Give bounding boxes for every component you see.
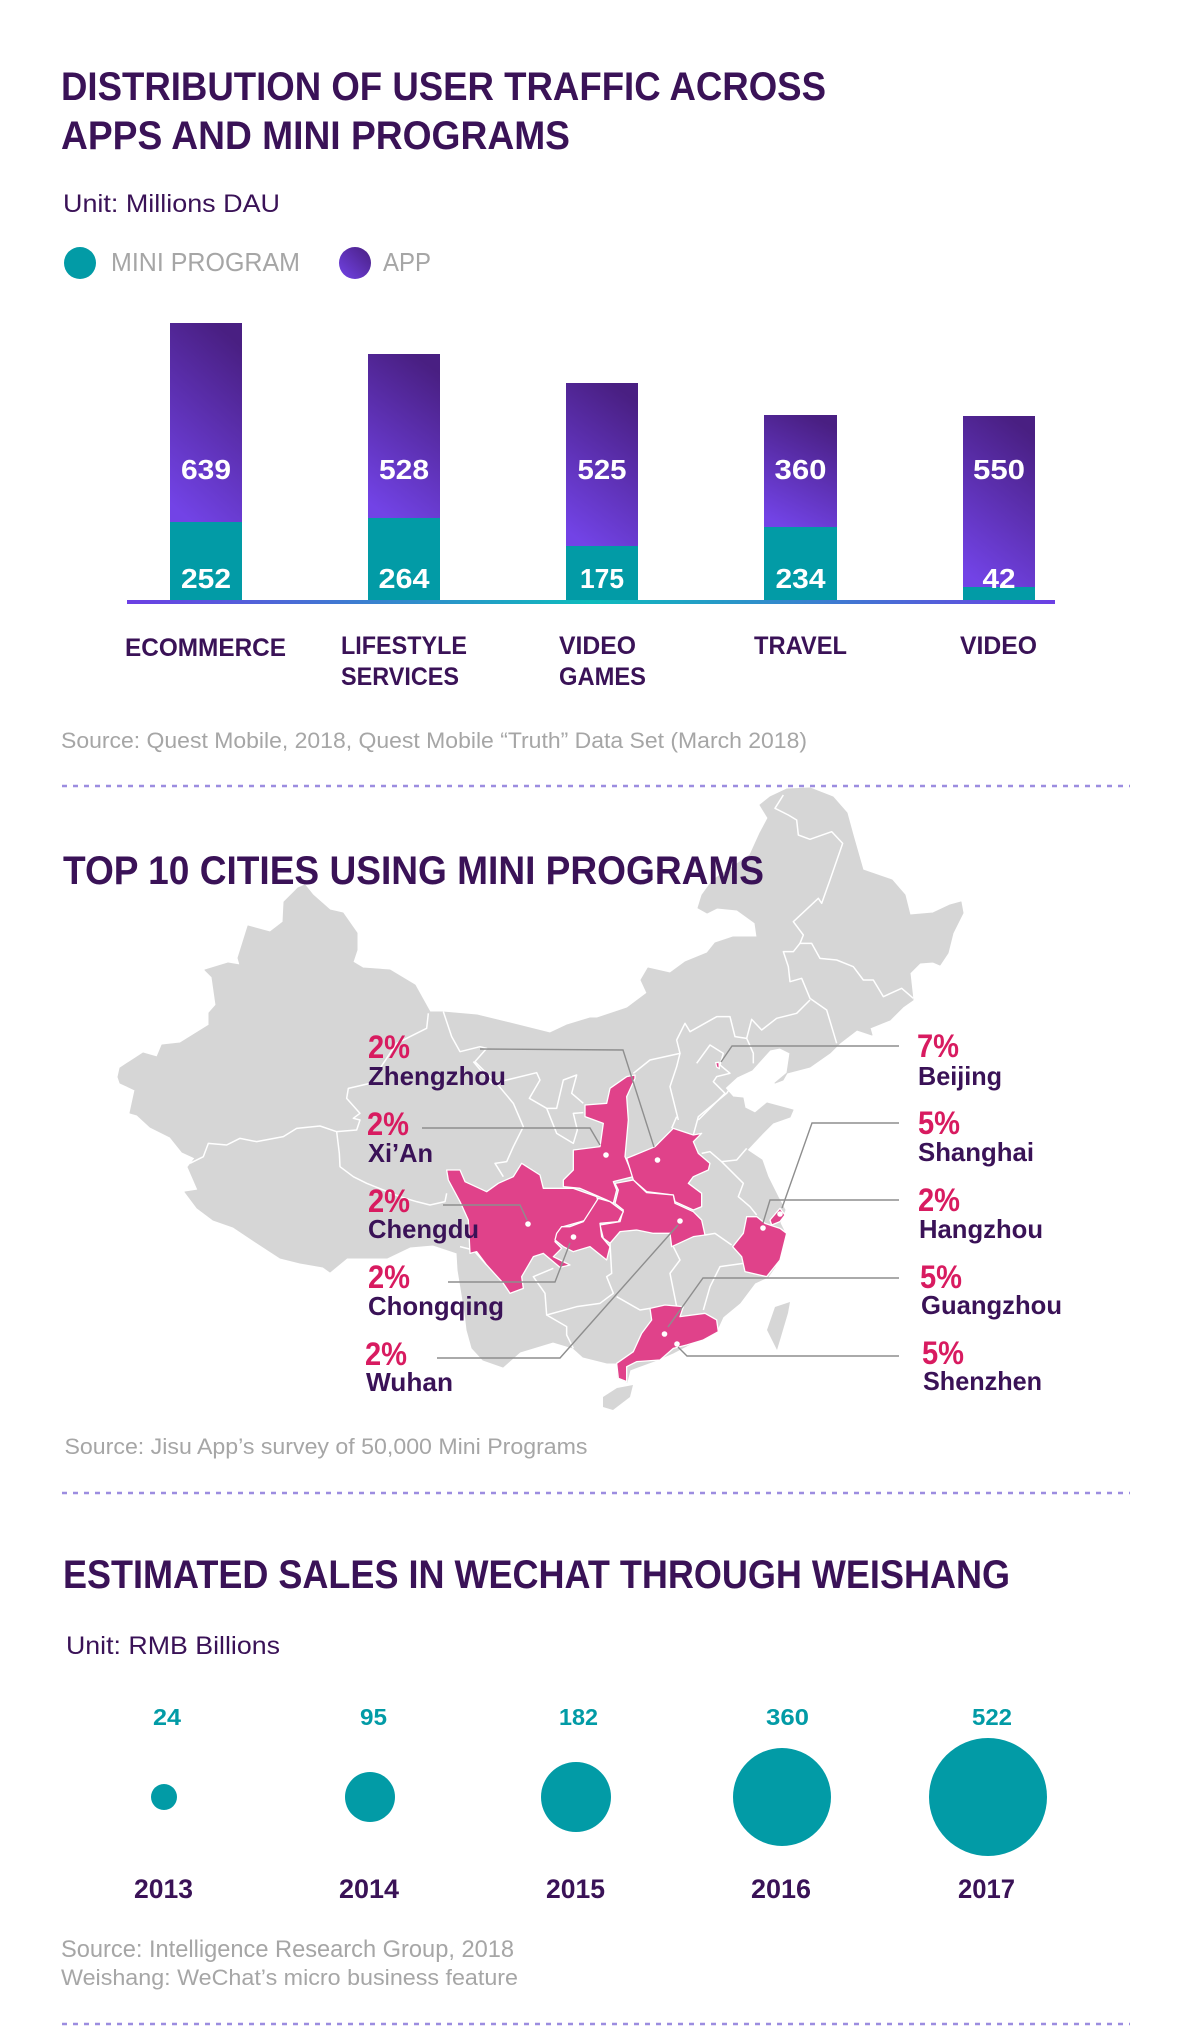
bubble: 2013: 24 bbox=[153, 1704, 181, 1730]
bar: video games bbox=[566, 383, 638, 602]
unit label: Unit: Millions DAU bbox=[63, 190, 280, 218]
bubble chart bbox=[134, 1704, 1047, 1904]
category labels: SERVICES bbox=[341, 663, 459, 691]
map: western province borders bbox=[190, 1012, 523, 1205]
province: Shaanxi bbox=[563, 1075, 635, 1203]
label: Chongqing: 2% bbox=[368, 1259, 410, 1295]
map of China bbox=[118, 788, 963, 1410]
bar: video: 550 bbox=[973, 454, 1025, 485]
label: Beijing: 7% bbox=[917, 1028, 959, 1064]
province: Shanghai bbox=[770, 1208, 785, 1225]
bar: video games: 175 bbox=[580, 563, 624, 594]
label: Wuhan: 2% bbox=[365, 1336, 407, 1372]
category labels: LIFESTYLE bbox=[341, 632, 467, 660]
bar: lifestyle services: 264 bbox=[378, 563, 430, 594]
title: distribution of user traffic bbox=[61, 65, 826, 158]
label: Guangzhou: Guangzhou bbox=[921, 1290, 1062, 1320]
bubble: 2016 bbox=[733, 1704, 831, 1904]
label: Zhengzhou: Zhengzhou bbox=[368, 1061, 506, 1091]
province: Beijing bbox=[716, 1062, 719, 1069]
province: Hubei bbox=[600, 1180, 705, 1247]
province: Sichuan bbox=[447, 1163, 600, 1293]
label: Guangzhou bbox=[920, 1259, 1062, 1320]
category labels: TRAVEL bbox=[754, 632, 847, 660]
bar: ecommerce: 639 bbox=[181, 454, 231, 485]
province: Guangdong bbox=[617, 1305, 718, 1382]
bubble: 2013 bbox=[134, 1704, 193, 1904]
province: Chongqing bbox=[555, 1198, 623, 1260]
bar: video bbox=[963, 416, 1035, 602]
label: Chengdu: 2% bbox=[368, 1183, 410, 1219]
label: Shanghai: 5% bbox=[918, 1105, 960, 1141]
label: Xi'An: 2% bbox=[367, 1106, 409, 1142]
label: Chengdu bbox=[368, 1183, 479, 1244]
label: Chongqing bbox=[368, 1259, 504, 1321]
source note: Source: Quest Mobile, 2018, Quest Mobile “Truth” Data Set (March 2018) bbox=[61, 728, 807, 753]
bubble: 2014: 95 bbox=[360, 1704, 387, 1730]
label: Beijing bbox=[917, 1028, 1002, 1091]
label: Shanghai bbox=[918, 1105, 1034, 1167]
bubble: 2015 bbox=[541, 1704, 611, 1904]
label: Shenzhen bbox=[922, 1335, 1042, 1396]
map: northeastern province borders bbox=[633, 795, 913, 1120]
map: Hainan bbox=[603, 1385, 633, 1410]
axis bbox=[127, 600, 1055, 604]
bubble: 2015: 182 bbox=[559, 1704, 598, 1730]
label: Xi'An bbox=[367, 1106, 433, 1168]
bubble: 2014: 2014 bbox=[339, 1874, 399, 1904]
bubble: 2016: 2016 bbox=[751, 1874, 811, 1904]
legend: APP bbox=[383, 247, 431, 277]
bar: video: 42 bbox=[982, 563, 1016, 594]
source note bbox=[61, 1936, 518, 1990]
legend: MINI PROGRAM bbox=[111, 247, 300, 277]
bar: travel: 234 bbox=[776, 563, 826, 594]
category labels bbox=[125, 632, 1037, 691]
bubble: 2014 bbox=[339, 1704, 399, 1904]
unit label: Unit: RMB Billions bbox=[66, 1632, 280, 1660]
map: Taiwan bbox=[767, 1302, 790, 1350]
category labels: ECOMMERCE bbox=[125, 634, 286, 662]
label: Beijing: Beijing bbox=[918, 1061, 1002, 1091]
bubble: 2017: 2017 bbox=[958, 1874, 1015, 1904]
bubble: 2017: 522 bbox=[972, 1704, 1012, 1730]
label: Zhengzhou bbox=[368, 1029, 506, 1091]
bar: video games: 525 bbox=[578, 454, 626, 485]
panel: user traffic distribution bbox=[61, 65, 1055, 753]
category labels: VIDEO bbox=[960, 632, 1037, 660]
legend bbox=[64, 247, 431, 279]
category labels: VIDEO bbox=[559, 632, 636, 660]
source note: Source: Jisu App’s survey of 50,000 Mini Programs bbox=[64, 1434, 588, 1459]
label: Shanghai: Shanghai bbox=[918, 1137, 1034, 1167]
label: Wuhan: Wuhan bbox=[366, 1367, 453, 1397]
title: distribution of user traffic: DISTRIBUTION OF USER TRAFFIC ACROSS bbox=[61, 65, 826, 109]
label: Wuhan bbox=[365, 1336, 453, 1397]
bubble: 2015: 2015 bbox=[546, 1874, 605, 1904]
bubble: 2013: 2013 bbox=[134, 1874, 193, 1904]
label: Hangzhou bbox=[918, 1182, 1043, 1244]
bubble: 2016: 360 bbox=[766, 1704, 809, 1730]
label: Chongqing: Chongqing bbox=[368, 1291, 504, 1321]
bar chart bbox=[125, 323, 1055, 691]
bar: lifestyle services: 528 bbox=[379, 454, 429, 485]
panel: estimated sales bbox=[61, 1553, 1047, 1990]
label: Hangzhou: Hangzhou bbox=[919, 1214, 1043, 1244]
map: highlighted provinces bbox=[447, 1062, 787, 1382]
label: Chengdu: Chengdu bbox=[368, 1214, 479, 1244]
province: Zhejiang bbox=[733, 1217, 787, 1277]
label: Guangzhou: 5% bbox=[920, 1259, 962, 1295]
label: Xi'An: Xi’An bbox=[368, 1138, 433, 1168]
leader lines bbox=[422, 1046, 899, 1358]
title: distribution of user traffic: APPS AND MINI PROGRAMS bbox=[61, 114, 570, 158]
title: top 10 cities: TOP 10 CITIES USING MINI PROGRAMS bbox=[63, 849, 764, 893]
category labels: GAMES bbox=[559, 663, 646, 691]
title: estimated sales: ESTIMATED SALES IN WECHAT THROUGH WEISHANG bbox=[63, 1553, 1010, 1597]
label: Shenzhen: Shenzhen bbox=[923, 1366, 1042, 1396]
bubble: 2017 bbox=[929, 1704, 1047, 1904]
source note: Source: Intelligence Research Group, 2018 bbox=[61, 1936, 514, 1963]
panel: top 10 cities map bbox=[63, 788, 1062, 1459]
label: Shenzhen: 5% bbox=[922, 1335, 964, 1371]
label: Zhengzhou: 2% bbox=[368, 1029, 410, 1065]
source note: Weishang: WeChat’s micro business feature bbox=[61, 1965, 518, 1990]
province: Henan bbox=[627, 1128, 710, 1210]
city dots bbox=[525, 1152, 783, 1347]
bar: ecommerce: 252 bbox=[181, 563, 231, 594]
bar: lifestyle services bbox=[368, 354, 440, 602]
label: Hangzhou: 2% bbox=[918, 1182, 960, 1218]
bar: travel: 360 bbox=[774, 454, 826, 485]
bar: travel bbox=[764, 415, 837, 602]
map: central province borders bbox=[460, 1062, 757, 1348]
bar: ecommerce bbox=[170, 323, 242, 602]
map: mainland bbox=[118, 788, 963, 1382]
